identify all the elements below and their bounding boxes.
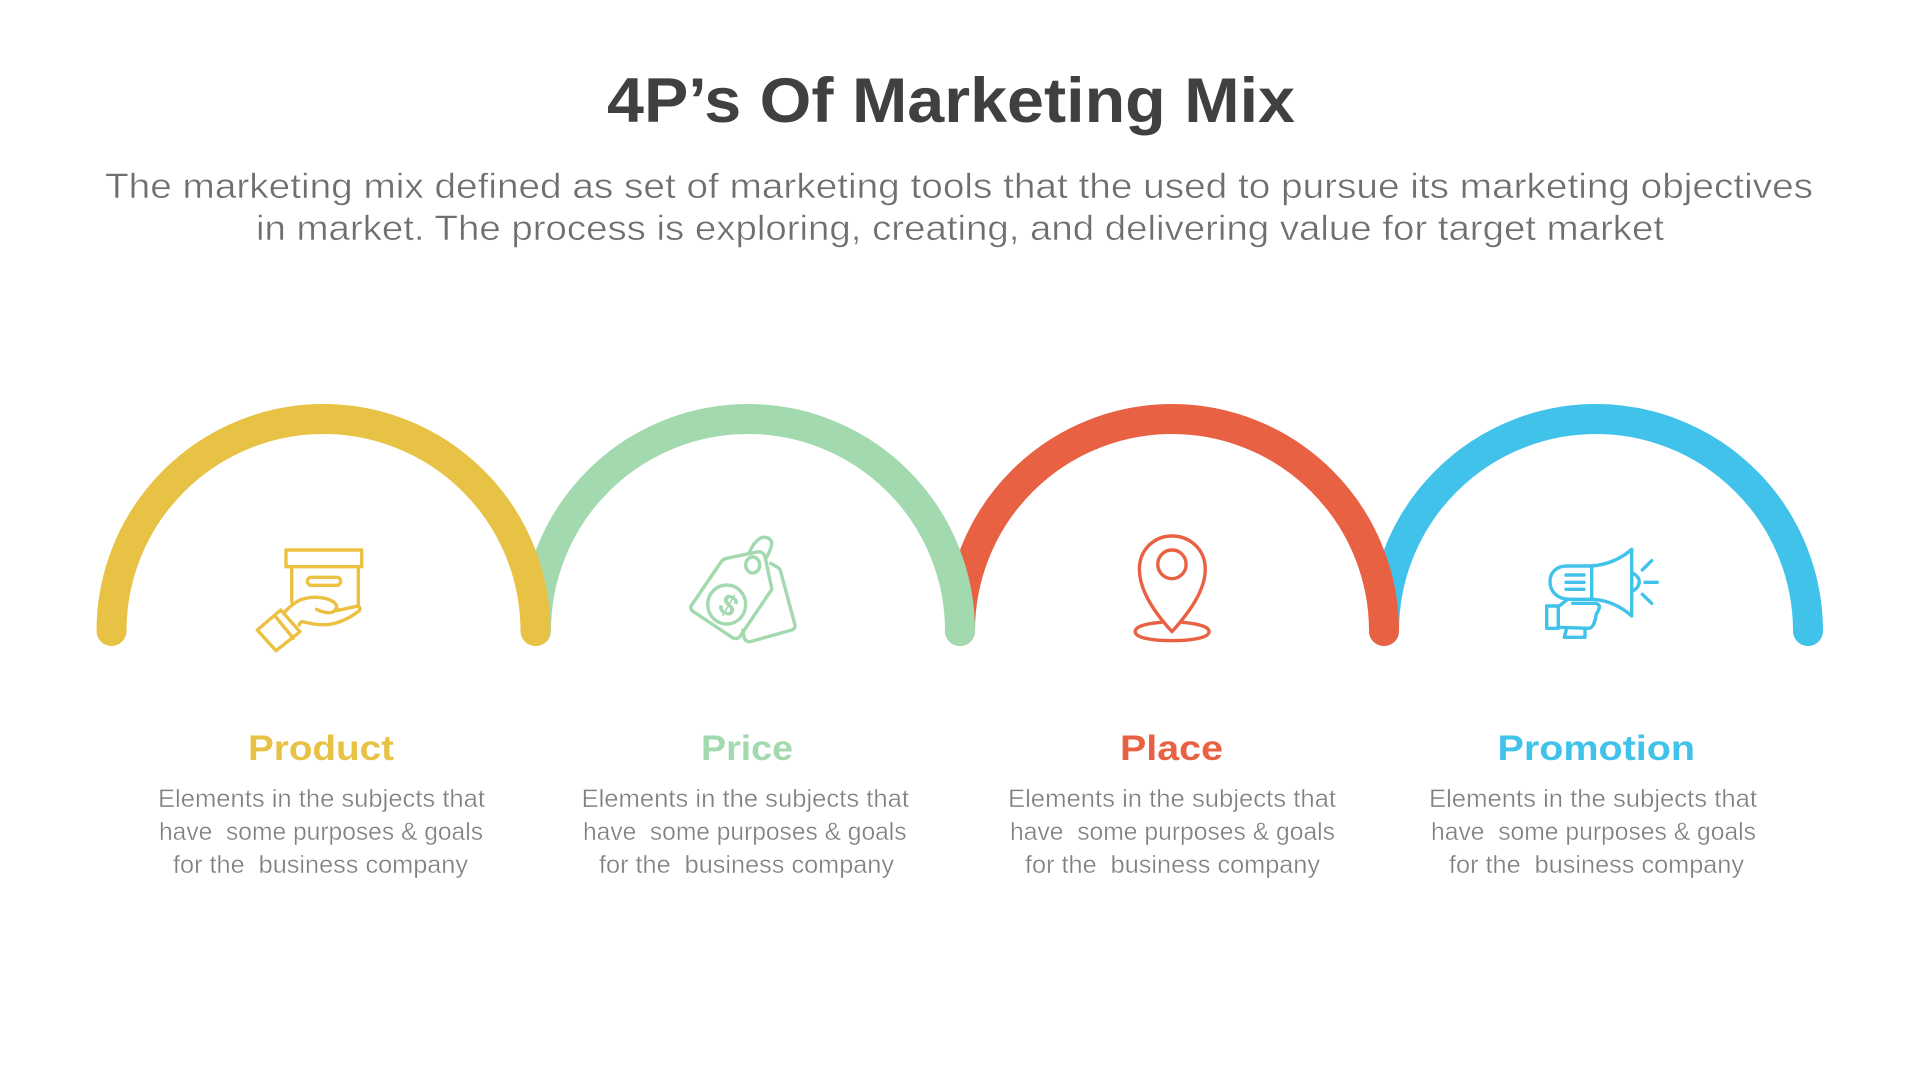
description: place: have some purposes & goals (1010, 818, 1335, 846)
heading: product: Product (248, 729, 394, 768)
icon: dollar sign: $ (713, 587, 744, 624)
description: price: for the business company (599, 851, 894, 879)
icon: price tags (691, 537, 795, 642)
panel: product text (158, 729, 485, 879)
arc: promotion (1384, 419, 1808, 631)
description: place (1008, 785, 1336, 879)
description: place: for the business company (1025, 851, 1320, 879)
description: product: have some purposes & goals (159, 818, 483, 846)
heading: promotion: Promotion (1498, 729, 1695, 768)
description: product (158, 785, 485, 879)
description: place: Elements in the subjects that (1008, 785, 1336, 813)
heading: place: Place (1120, 729, 1223, 768)
heading: price: Price (701, 729, 793, 768)
description: price (582, 785, 909, 879)
icon: location pin (1135, 536, 1209, 641)
description: product: for the business company (173, 851, 468, 879)
description: price: have some purposes & goals (583, 818, 906, 846)
icon: hand holding box (257, 550, 362, 651)
description: promotion (1429, 785, 1757, 879)
panel: price text (582, 729, 909, 879)
arc: product (112, 419, 536, 631)
description: promotion: have some purposes & goals (1431, 818, 1756, 846)
description: price: Elements in the subjects that (582, 785, 909, 813)
panel: promotion text (1429, 729, 1757, 879)
description: promotion: for the business company (1449, 851, 1744, 879)
panel: place text (1008, 729, 1336, 879)
icon: megaphone (1547, 549, 1657, 637)
arc: place (960, 419, 1384, 631)
arc: price (536, 419, 960, 631)
description: promotion: Elements in the subjects that (1429, 785, 1757, 813)
subtitle text block: in market. The process is exploring, creating, and delivering value for target market (256, 209, 1664, 248)
description: product: Elements in the subjects that (158, 785, 485, 813)
subtitle text block: The marketing mix defined as set of marketing tools that the used to pursue its marketing objectives (105, 167, 1813, 206)
title: 4P’s Of Marketing Mix (607, 66, 1295, 136)
subtitle text block (105, 167, 1813, 248)
